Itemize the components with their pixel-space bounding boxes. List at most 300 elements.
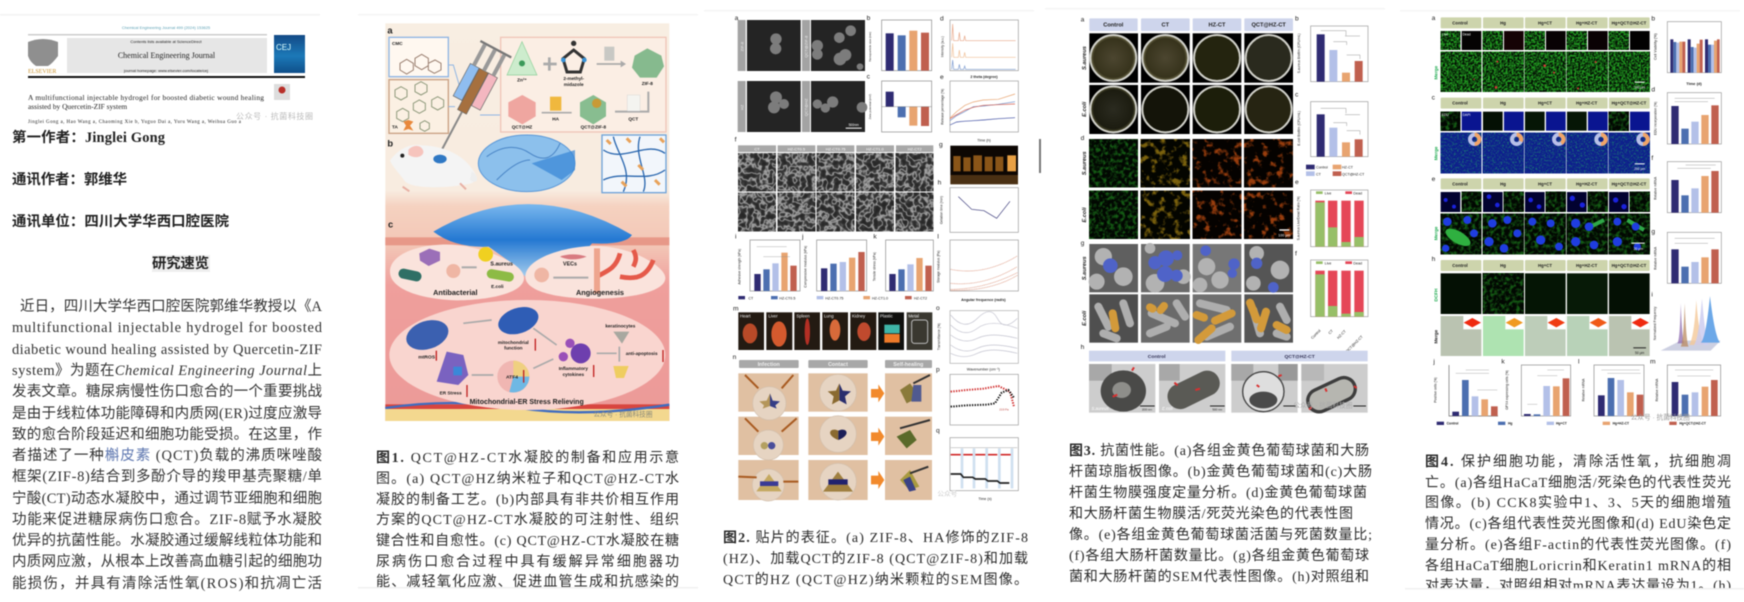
storage modulus chart: l — [937, 233, 939, 240]
live dead fluorescence: E.coli — [1082, 207, 1088, 223]
live dead stacked chart f: CT — [1328, 328, 1335, 335]
SEM images: 500nm — [849, 123, 859, 127]
panel: article overview — [0, 14, 323, 592]
rheology chart q — [936, 428, 1018, 501]
bar chart k — [1501, 358, 1571, 416]
F-actin row: Hg+HZ-CT — [1576, 181, 1598, 186]
live dead stacked chart f: Live — [1325, 261, 1331, 265]
bar legend: HZ-CT1.0 — [872, 296, 888, 300]
bar chart: zeta potential: c — [867, 73, 871, 80]
SEM images: HZ — [739, 104, 744, 110]
fat and vessel layers — [385, 403, 669, 421]
figure 1 illustration — [385, 23, 669, 421]
DCFH row header: Hg — [1500, 263, 1506, 268]
figure 3 caption — [1069, 442, 1372, 585]
flow histogram i — [1651, 292, 1721, 351]
panel: figure 3 antibacterial performance — [1045, 8, 1385, 585]
TEM comparison h: S.aureus — [1091, 406, 1109, 411]
EdU row: Hg+HZ-CT — [1576, 101, 1598, 106]
figure 2 caption — [723, 530, 1028, 588]
live dead stacked chart e: Live — [1325, 191, 1331, 195]
figure 4 caption: 图4. 保护细胞功能，清除活性氧，抗细胞凋 — [1425, 454, 1731, 470]
bar chart m: Relative mRNA — [1655, 378, 1659, 401]
bar chart j — [1432, 358, 1498, 416]
subpanel a: QCT@HZ synthesis: QCT@ZIF-8 — [581, 125, 606, 130]
adhesion organ photos m: Lung — [824, 314, 834, 319]
subpanel b: mouse and gel network: b — [387, 139, 393, 149]
adhesion organ photos m — [733, 306, 932, 350]
EdU row: Control — [1452, 101, 1468, 106]
mitochondrial and ER stress ellipse: function — [504, 346, 523, 351]
biofilm bar chart c: c — [1295, 92, 1299, 99]
mitochondrial and ER stress ellipse: anti-apoptosis — [626, 351, 658, 356]
antibacterial ellipse: S.aureus — [490, 261, 513, 267]
EdU row: Hg — [1500, 101, 1506, 106]
F-actin row: Merge — [1433, 226, 1438, 240]
mitochondrial and ER stress ellipse: cytokines — [563, 372, 584, 377]
flow histogram i: Normalized Frequency — [1653, 306, 1657, 340]
bar chart l: Relative mRNA — [1582, 378, 1586, 401]
agar plates — [1082, 33, 1293, 134]
figure 1 caption: 方案的QCT@HZ-CT水凝胶的可注射性、组织 — [376, 511, 679, 528]
TEM comparison h: 200 nm — [1142, 408, 1152, 412]
figure 4 caption: 情况。(c)各组代表性荧光图像和(d) EdU染色定 — [1425, 515, 1731, 532]
merged brightfield row: Merge — [1433, 329, 1438, 344]
antibacterial ellipse: E.coli — [491, 284, 504, 289]
EdU bar chart d — [1651, 87, 1721, 144]
self-healing photo grid: Self-healing — [893, 362, 923, 368]
biofilm bar chart b — [1295, 16, 1368, 82]
XRD chart: Intensity (a.u.) — [940, 36, 944, 57]
subpanel a: QCT@HZ synthesis: midazole — [564, 82, 584, 87]
bar legend: HZ-CT0.5 — [779, 296, 795, 300]
TEM comparison h: Control — [1148, 354, 1166, 360]
journal header: journal homepage: www.elsevier.com/locate/cej — [123, 68, 208, 73]
figure 4 caption: 各组HaCaT细胞Loricrin和Keratin1 mRNA的相 — [1425, 558, 1731, 574]
syringe — [427, 40, 512, 159]
mitochondrial and ER stress ellipse — [389, 300, 665, 410]
subpanel a: QCT@HZ synthesis: 2-methyl- — [563, 76, 584, 81]
figure 3 caption: 杆菌琼脂板图像。(b)金黄色葡萄球菌和(c)大肠 — [1069, 463, 1372, 480]
live dead stacked chart f: HZ-CT — [1336, 329, 1347, 340]
mRNA bar chart g: g — [1651, 228, 1655, 235]
EdU row: 200 μm — [1634, 167, 1645, 171]
bar chart: hydrodynamic size: b — [867, 15, 871, 22]
release curve chart: Time (h) — [977, 139, 991, 143]
TEM comparison h — [1081, 344, 1368, 416]
legend — [1437, 422, 1706, 426]
E. coli SEM row: E.coli — [1082, 310, 1088, 326]
subpanel a: CMC and TA — [387, 25, 501, 133]
figure 2 caption: (HZ)、加载QCT的ZIF-8 (QCT@ZIF-8)和加载 — [723, 551, 1028, 567]
live dead row: Control — [1452, 20, 1468, 25]
figure 1 caption: 键合性和自愈性。(c) QCT@HZ-CT水凝胶在糖 — [376, 532, 679, 549]
body text: 能损伤，并具有清除活性氧(ROS)和抗凋亡活 — [12, 575, 322, 592]
cell viability chart b: Cell Viability (%) — [1654, 33, 1658, 60]
mRNA bar chart f: Relative mRNA — [1654, 176, 1658, 200]
figure 3 caption: 图3. 抗菌性能。(a)各组金黄色葡萄球菌和大肠 — [1069, 442, 1369, 459]
bar chart l — [1578, 358, 1644, 416]
author information — [12, 128, 230, 230]
rheology chart q: q — [936, 428, 940, 435]
bar chart: tensile strength — [872, 233, 933, 291]
bar chart: adhesive strength: i — [735, 233, 737, 240]
merged brightfield row: 50 μm — [1635, 351, 1645, 355]
angiogenesis ellipse: VECs — [563, 261, 577, 267]
bar chart: compressive modulus: Compressive modulus (kPa) — [804, 246, 808, 288]
hydrogel SEM grid: f — [735, 136, 737, 143]
body text: 者描述了一种槲皮素 (QCT)负载的沸质咪唑酸 — [12, 447, 322, 464]
chart legend: Control — [1316, 165, 1328, 169]
live dead fluorescence: 100 μm — [1278, 234, 1290, 238]
mRNA bar chart f — [1651, 155, 1721, 213]
hydrogel photo g — [939, 142, 1018, 184]
figure 1 caption: 尿病伤口愈合过程中具有缓解异常细胞器功 — [376, 554, 679, 570]
TEM comparison h: E.coli — [1162, 406, 1174, 411]
XRD chart: d — [940, 16, 944, 23]
cell viability chart b: Time (d) — [1686, 81, 1702, 86]
journal header: Contents lists available at ScienceDirect — [130, 39, 202, 44]
merged brightfield row — [1433, 288, 1650, 356]
body text: system》为题在Chemical Engineering Journal上 — [12, 362, 322, 379]
biofilm bar chart b: b — [1295, 16, 1299, 23]
figure 3 caption: 杆菌生物膜强度定量分析。(d)金黄色葡萄球菌 — [1069, 484, 1367, 501]
subpanel a: CMC and TA: CMC — [392, 41, 403, 46]
release curve chart: Release percentage (%) — [940, 89, 944, 125]
article title: A multifunctional injectable hydrogel for boosted diabetic wound healing — [28, 93, 264, 102]
figure 3 caption: 和大肠杆菌生物膜活/死荧光染色的代表性图 — [1069, 505, 1353, 522]
TEM comparison h: QCT@HZ-CT — [1284, 354, 1315, 360]
legend: Hg+CT — [1556, 422, 1567, 426]
F-actin row: Hg+QCT@HZ-CT — [1612, 181, 1647, 186]
adhesion organ photos m: Heart — [740, 314, 751, 319]
rheology chart p: p — [936, 367, 940, 374]
subpanel c: dome hydrogel on wound: c — [388, 220, 393, 230]
live dead fluorescence: d — [1081, 135, 1085, 142]
journal header: CEJ — [276, 43, 291, 52]
bar chart j: j — [1432, 358, 1435, 365]
figure 2 caption: QCT的HZ (QCT@HZ)纳米颗粒的SEM图像。 — [723, 572, 1028, 588]
SEM images: QCT@ZIF-8 — [804, 35, 809, 58]
EdU row: Hg+CT — [1538, 101, 1552, 106]
hydrogel SEM grid: HZ-CT2 — [908, 146, 923, 151]
live dead stacked chart f: Dead — [1353, 261, 1362, 265]
DCFH row header: Hg+CT — [1538, 263, 1552, 268]
article title: Jinglei Gong a, Hao Wang a, Chaoming Xie b, Yuguo Dai a, Yuru Wang a, Weihua Guo a — [28, 120, 242, 125]
S. aureus SEM row: S.aureus — [1082, 256, 1088, 280]
bar legend: HZ-CT2 — [914, 296, 927, 300]
biofilm bar chart c — [1295, 92, 1368, 157]
self-healing photo grid: Infection — [758, 362, 780, 368]
agar plates: E.coli — [1082, 101, 1088, 117]
live dead row: Dead — [1463, 33, 1471, 37]
live dead stacked chart f: f — [1295, 250, 1297, 257]
FTIR chart: Transmittance (%) — [937, 323, 941, 350]
DCFH row header: h — [1432, 256, 1436, 263]
lower figure 2 charts and photographs — [733, 233, 1018, 501]
subpanel a: CMC and TA: TA — [392, 124, 398, 129]
figure 4 caption: 图像。(b) CCK8实验中1、3、5天的细胞增殖 — [1425, 494, 1731, 511]
F-actin row: Hg — [1500, 181, 1506, 186]
figure 1 caption: 凝胶的制备工艺。(b)内部具有非共价相互作用 — [376, 491, 679, 508]
body text: multifunctional injectable hydrogel for boosted — [12, 320, 323, 336]
figure 1 caption: 图1. QCT@HZ-CT水凝胶的制备和应用示意 — [376, 449, 679, 466]
live dead row: Hg+QCT@HZ-CT — [1612, 20, 1647, 25]
live dead stacked chart f — [1295, 250, 1368, 353]
author information: 第一作者：Jinglei Gong — [12, 128, 166, 146]
bar chart m: m — [1650, 358, 1656, 365]
adhesion organ photos m: Spleen — [796, 314, 810, 319]
body text: 优异的抗菌性能。水凝胶通过缓解线粒体功能和 — [12, 532, 322, 549]
body text: 近日，四川大学华西口腔医院郭维华教授以《A — [20, 298, 323, 315]
figure 3 caption: (f)各组大肠杆菌数量比。(g)各组金黄色葡萄球 — [1069, 547, 1369, 564]
adhesion organ photos m: Plastic — [880, 314, 894, 319]
XRD chart: 2 theta (degree) — [970, 75, 998, 79]
self-healing photo grid: n — [733, 354, 737, 361]
bar legend: HZ-CT0.75 — [825, 296, 843, 300]
self-healing photo grid — [733, 354, 932, 501]
legend: Hg+HZ-CT — [1613, 422, 1629, 426]
DCFH row header: Hg+HZ-CT — [1576, 263, 1598, 268]
lower figure 3 — [1081, 250, 1368, 416]
self-healing photo grid: Contact — [828, 362, 848, 368]
S. aureus SEM row — [1081, 240, 1293, 293]
figure 3 caption: 像。(e)各组金黄色葡萄球菌活菌与死菌数量比; — [1069, 526, 1372, 543]
figure 4 caption — [1425, 454, 1731, 594]
author information: 通讯单位：四川大学华西口腔医院 — [12, 212, 230, 230]
journal header: ELSEVIER — [28, 69, 56, 75]
agar plates: S.aureus — [1082, 46, 1088, 70]
SEM images: ZIF-8 — [739, 41, 744, 51]
mRNA bar chart g: Relative mRNA — [1654, 246, 1658, 270]
group headers: a — [1081, 16, 1085, 23]
FTIR chart: o — [936, 305, 940, 312]
figure 4 caption: 亡。(a)各组HaCaT细胞活/死染色的代表性荧光 — [1425, 474, 1731, 491]
bar chart: hydrodynamic size — [867, 15, 932, 71]
DCFH row header: Control — [1452, 263, 1468, 268]
F-actin row: Hg+CT — [1538, 181, 1552, 186]
bar chart: tensile strength: k — [873, 233, 877, 240]
DCFH row header — [1432, 256, 1650, 314]
live dead fluorescence: S.aureus — [1082, 151, 1088, 175]
FTIR chart: Wavenumber (cm⁻¹) — [967, 367, 1000, 371]
figure 4 caption: 量分析。(e)各组F-actin的代表性荧光图像。(f) — [1425, 536, 1731, 553]
group headers: CT — [1162, 22, 1170, 28]
figure 1 caption — [376, 449, 679, 590]
journal header — [28, 25, 305, 100]
chart legend: CT — [1316, 172, 1322, 176]
figure 1 caption: 能、减轻氧化应激、促进血管生成和抗感染的 — [376, 573, 679, 590]
release curve chart — [940, 74, 1018, 143]
adhesion organ photos m: Kidney — [852, 314, 866, 319]
mRNA bar chart g — [1651, 228, 1721, 283]
article title — [28, 93, 264, 125]
bar legend: CT — [748, 296, 754, 300]
EdU row: EDU — [1442, 113, 1449, 117]
watermark: 公众号 · 抗菌科技圈 — [236, 111, 313, 121]
E. coli SEM row — [1082, 294, 1293, 343]
bar chart: hydrodynamic size: Nanoparticle size (nm) — [868, 32, 872, 62]
bar chart l: l — [1578, 358, 1580, 365]
TEM comparison h: 500 nm — [1212, 408, 1223, 412]
body text — [12, 298, 323, 592]
live dead stacked chart f: Control — [1310, 329, 1322, 340]
gelation time chart: h — [938, 179, 942, 186]
cell viability chart b — [1651, 16, 1721, 86]
scroll indicator — [1039, 139, 1041, 173]
XRD chart — [940, 16, 1018, 79]
body text: 宁酸(CT)动态水凝胶中，通过调节亚细胞和细胞 — [12, 490, 322, 507]
lower figure 4 — [1432, 288, 1721, 426]
panel: figure 2 patch characterization — [704, 10, 1041, 588]
EdU row — [1432, 94, 1650, 173]
body text: 发表文章。糖尿病慢性伤口愈合的一个重要挑战 — [12, 382, 322, 400]
SEM images: QCT@HZ — [804, 98, 809, 116]
body text: 框架(ZIF-8)结合到多酚介导的羧甲基壳聚糖/单 — [12, 467, 322, 485]
adhesion organ photos m: Liver — [768, 314, 778, 319]
gelation time chart: Gelation time (min) — [940, 196, 944, 224]
body text: 功能来促进糖尿病伤口愈合。ZIF-8赋予水凝胶 — [12, 511, 322, 528]
mitochondrial and ER stress ellipse: ER Stress — [440, 391, 462, 396]
journal header: Chemical Engineering Journal 499 (2024) 153625 — [122, 25, 211, 30]
angiogenesis ellipse: Angiogenesis — [576, 288, 624, 297]
gelation time chart — [938, 179, 1018, 232]
bar chart: compressive modulus — [801, 233, 867, 291]
body text: diabetic wound healing assisted by Quercetin-ZIF — [12, 342, 322, 358]
hydrogel SEM grid: HZ-CT1.0 — [866, 146, 885, 151]
body text: 内质网应激，从根本上改善高血糖引起的细胞功 — [12, 552, 322, 570]
panel: figure 1 hydrogel schematic — [358, 14, 698, 602]
subpanel a: QCT@HZ synthesis: Zn²⁺ — [517, 78, 527, 83]
live dead stacked chart e: e — [1295, 179, 1299, 186]
author information: 通讯作者：郭维华 — [12, 170, 127, 188]
figure 4 caption: 对表达量，对照组相对mRNA表达量设为1。(h) — [1425, 578, 1731, 594]
TEM comparison h: h — [1081, 344, 1085, 351]
mRNA bar chart f: f — [1651, 155, 1653, 162]
upper figure 3 — [1081, 16, 1368, 293]
live dead row: Hg — [1500, 20, 1506, 25]
EdU row: c — [1432, 94, 1436, 101]
adhesion organ photos m: Metal — [908, 314, 919, 319]
chart legend: QCT@HZ-CT — [1342, 172, 1365, 176]
group headers: HZ-CT — [1209, 22, 1226, 28]
bar chart: tensile strength: Tensile stress (kPa) — [872, 252, 876, 281]
flow histogram i: i — [1651, 292, 1653, 299]
F-actin row — [1432, 176, 1650, 254]
merged brightfield row: DCFH — [1433, 288, 1438, 301]
subpanel b: mouse and gel network — [387, 135, 666, 193]
live dead row — [1432, 15, 1650, 92]
bar chart k: GPX4 expressing cells (%) — [1505, 370, 1509, 410]
mitochondrial and ER stress ellipse: ATF4 — [506, 374, 518, 380]
hydrogel SEM grid: HZ-CT0.5 — [788, 146, 806, 151]
S. aureus SEM row: g — [1081, 240, 1085, 247]
watermark: 公众号 — [937, 490, 958, 498]
group headers — [1081, 16, 1293, 31]
legend: Control — [1447, 422, 1459, 426]
group headers: QCT@HZ-CT — [1251, 22, 1286, 28]
journal header: Chemical Engineering Journal — [118, 51, 216, 60]
watermark: 公众号 · 抗菌科技圈 — [1293, 401, 1353, 410]
rheology chart p: 219 Pa — [999, 408, 1009, 412]
biofilm bar chart c: E.coli Biofilm (CFU/mL) — [1297, 111, 1301, 146]
hydrogel SEM grid: CT — [754, 146, 760, 151]
chart legend: HZ-CT — [1342, 165, 1354, 169]
legend: Hg+QCT@HZ-CT — [1679, 422, 1706, 426]
hydrogel photo g: g — [939, 142, 943, 149]
upper figure 2 charts and micrographs — [735, 15, 1018, 232]
live dead stacked chart e: Dead — [1353, 191, 1362, 195]
live dead stacked chart f: QCT@HZ-CT — [1345, 334, 1364, 353]
body text: 致的愈合阶段延迟和细胞功能受损。在这里，作 — [12, 426, 322, 443]
live dead row: 100 μm — [1634, 86, 1645, 90]
bar chart j: Positive cells (%) — [1434, 377, 1438, 403]
subpanel a: QCT@HZ synthesis — [501, 37, 666, 132]
legend: Hg — [1508, 422, 1512, 426]
watermark: 公众号 · 抗菌科技圈 — [593, 410, 653, 419]
biofilm bar chart b: S.aureus Biofilm (CFU/mL) — [1297, 33, 1301, 73]
subpanel a: QCT@HZ synthesis: ZIF-8 — [642, 81, 653, 86]
DCFH row header: Hg+QCT@HZ-CT — [1612, 263, 1647, 268]
SEM images — [735, 15, 867, 132]
storage modulus chart: Storage modulus (Pa) — [936, 250, 940, 283]
subpanel a: CMC and TA: a — [387, 25, 393, 35]
watermark: 公众号 · 抗菌科技圈 — [1631, 412, 1690, 421]
antibacterial ellipse: Antibacterial — [433, 288, 478, 297]
EdU row: DAPI — [1463, 113, 1471, 117]
subpanel a: QCT@HZ synthesis: HA — [552, 117, 560, 122]
rheology chart p — [936, 367, 1018, 425]
antibacterial ellipse — [390, 245, 524, 300]
live dead row: Merge — [1433, 65, 1438, 80]
angiogenesis ellipse — [525, 246, 665, 299]
article title: assisted by Quercetin-ZIF system — [28, 102, 127, 111]
subpanel a: QCT@HZ synthesis: QCT — [628, 117, 638, 122]
mitochondrial and ER stress ellipse: keratinocytes — [605, 324, 636, 329]
bar chart: adhesive strength: Adhesive strength (kPa) — [738, 249, 742, 284]
adhesion organ photos m: m — [733, 306, 739, 313]
live dead row: Hg+HZ-CT — [1576, 20, 1598, 25]
SEM images: a — [735, 15, 739, 22]
F-actin row: 20 μm — [1634, 247, 1643, 251]
bar chart: adhesive strength — [735, 233, 800, 291]
live dead fluorescence — [1081, 135, 1293, 239]
FTIR chart — [936, 305, 1018, 371]
live dead row: Live — [1442, 33, 1448, 37]
figure 1 caption: 图。(a) QCT@HZ纳米粒子和QCT@HZ-CT水 — [376, 471, 679, 487]
EdU bar chart d: d — [1651, 87, 1655, 94]
EdU row: Merge — [1433, 146, 1438, 160]
subpanel a: QCT@HZ synthesis: QCT@HZ — [512, 125, 532, 130]
EdU bar chart d: EDU incorporation (%) — [1654, 102, 1658, 135]
bar chart k: k — [1501, 358, 1505, 365]
rheology chart q: Time (s) — [978, 497, 992, 501]
EdU row: Hg+QCT@HZ-CT — [1612, 101, 1647, 106]
release curve chart: e — [940, 74, 944, 81]
mitochondrial and ER stress ellipse: Mitochondrial-ER Stress Relieving — [470, 399, 584, 406]
mitochondrial and ER stress ellipse: Inflammatory — [559, 366, 588, 371]
mitochondrial and ER stress ellipse: mtROS — [418, 354, 436, 360]
live dead stacked chart e: S.aureus Live/Dead Ratio (%) — [1296, 196, 1300, 240]
mitochondrial and ER stress ellipse: mitochondrial — [498, 340, 529, 345]
bar chart m — [1650, 358, 1721, 416]
bar chart: compressive modulus: j — [801, 233, 804, 240]
group headers: Control — [1103, 22, 1124, 28]
heading: research overview: 研究速览 — [152, 254, 209, 272]
panel: figure 4 cell protection — [1400, 10, 1744, 602]
bar chart: zeta potential: Zeta potential (mV) — [868, 94, 872, 119]
hydrogel SEM grid — [735, 136, 933, 231]
